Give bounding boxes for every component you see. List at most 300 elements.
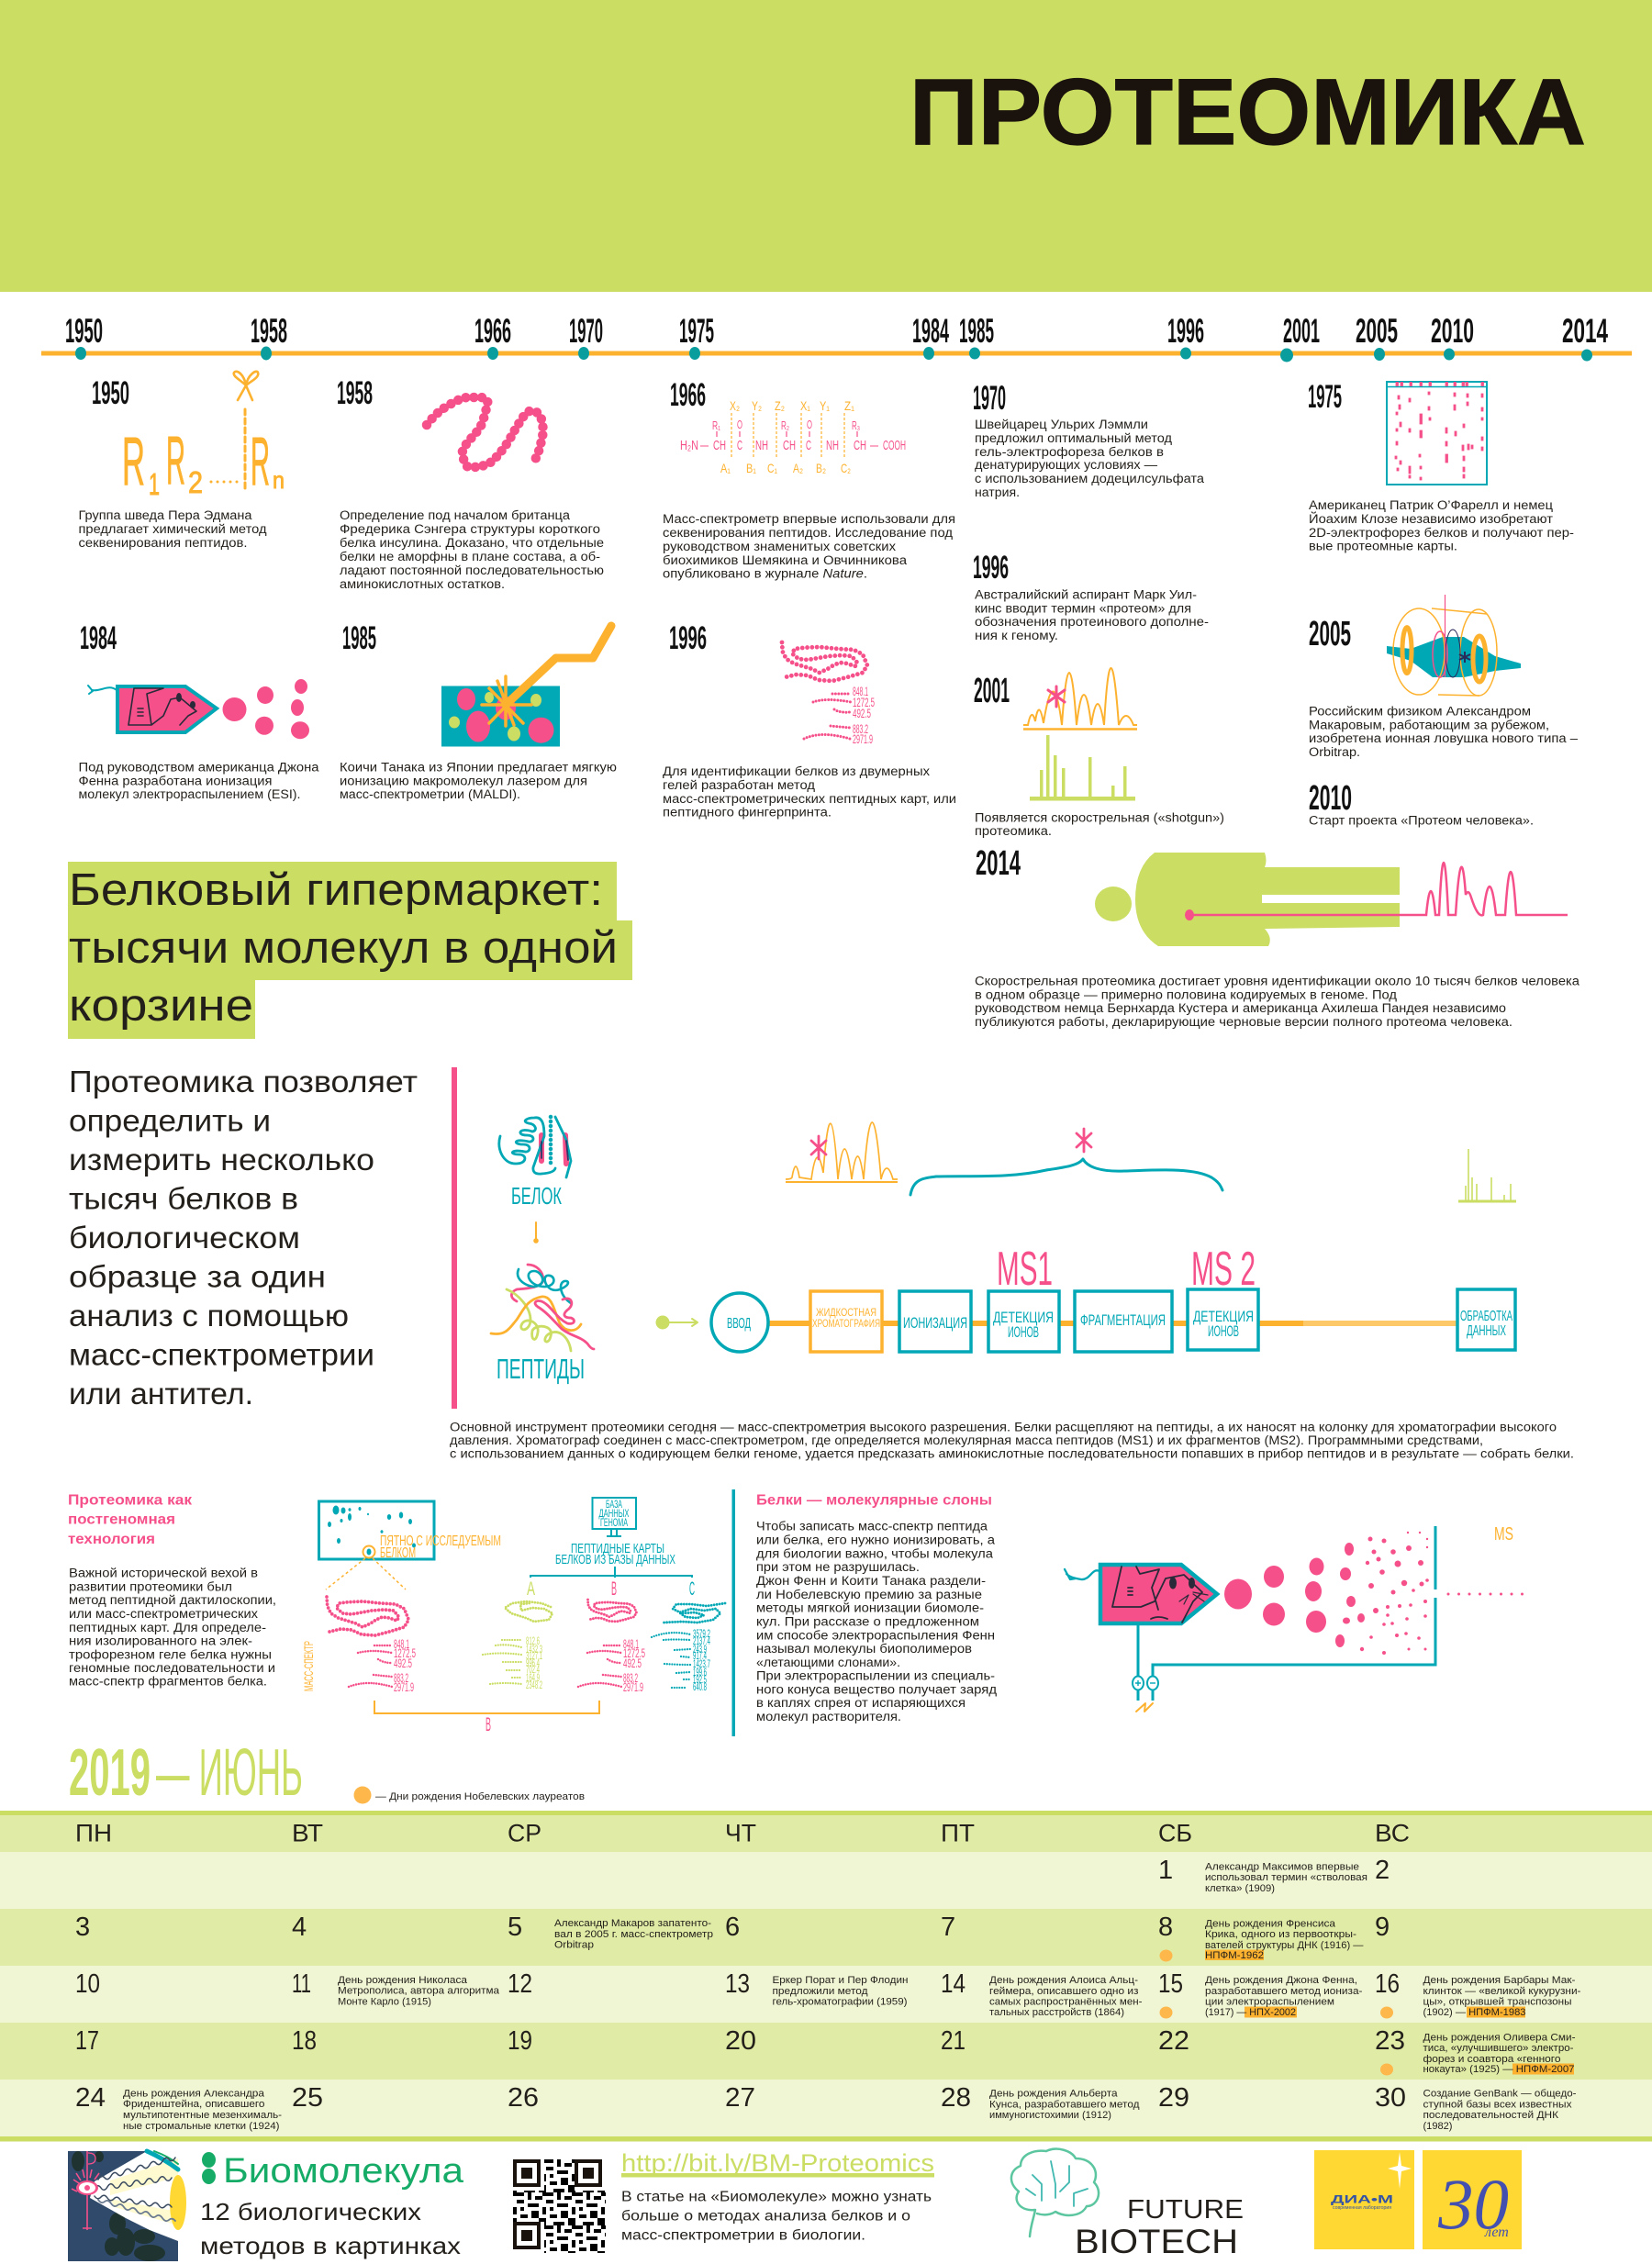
text elephants: методы мягкой ионизации биомоле-	[756, 1600, 984, 1615]
text 1985	[340, 760, 617, 801]
chart: spectrum C: 3579.2	[693, 1627, 710, 1640]
chart: spectrum C: 199.6	[693, 1666, 707, 1678]
step: ion detection 2	[1188, 1289, 1258, 1350]
weekday header: ПН	[75, 1819, 112, 1846]
text: 12 methods	[200, 2198, 461, 2259]
title: ПРОТЕОМИКА	[910, 60, 1586, 164]
day numbers: 27	[725, 2083, 755, 2113]
text 1996 right: кинс вводит термин «протеом» для	[975, 601, 1191, 615]
day numbers: 25	[292, 2083, 323, 2113]
note: June 30: Создание GenBank — общедо-	[1423, 2089, 1577, 2100]
text 1950	[79, 508, 267, 550]
note: June 24: мультипотентные мезенхималь-	[123, 2110, 282, 2121]
protein C	[664, 1603, 725, 1623]
chart: spectrum B: 1272.5	[623, 1645, 645, 1660]
chart: spectrum C: 917.4	[693, 1649, 707, 1662]
day numbers: 19	[508, 2026, 532, 2056]
text 1970	[975, 418, 1205, 499]
logo: Future Biotech: BIOTECH	[1075, 2223, 1238, 2260]
day numbers: 13	[725, 1969, 750, 1999]
text 1996 left: масс-спектрометрических пептидных карт, или	[663, 792, 956, 806]
text 1966: Масс-спектрометр впервые использовали для	[663, 512, 955, 526]
text 1996 left: Для идентификации белков из двумерных	[663, 764, 930, 778]
pipeline line	[769, 1321, 1457, 1326]
panel: 2010: 2010	[1309, 779, 1352, 818]
arrow down	[533, 1222, 539, 1244]
text 1958: Определение под началом британца	[340, 508, 571, 522]
calendar heading: — ИЮНЬ	[156, 1736, 303, 1810]
note: June 15: День рождения Джона Фенна,	[1205, 1975, 1357, 1986]
text 1970: предложил оптимальный метод	[975, 431, 1172, 445]
label: A: A	[527, 1578, 535, 1600]
panel: 2001: 2001	[974, 672, 1010, 710]
text 1966: опубликовано в журнале Nature .	[663, 567, 867, 580]
text elephants: ного конуса вещество получает заряд	[756, 1683, 997, 1696]
text 1985: масс-спектрометрии (MALDI).	[340, 787, 520, 801]
text: 12 methods: методов в картинках	[200, 2232, 461, 2259]
QR code	[513, 2159, 606, 2253]
icon: peptide mass fingerprint: 492.5	[853, 706, 871, 720]
chart: spectrum A: 164.9	[526, 1671, 540, 1684]
note: June 14: тальных расстройств (1864)	[989, 2007, 1124, 2018]
timeline years: 1975	[679, 312, 714, 350]
icon: peptide mass fingerprint: 848.1	[853, 684, 868, 698]
step: fragmentation	[1075, 1291, 1172, 1352]
day numbers: 11	[292, 1969, 311, 1999]
weekday header: СБ	[1158, 1819, 1192, 1846]
day numbers: 1	[1158, 1856, 1173, 1885]
heading elephants: Белки — молекулярные слоны	[756, 1492, 992, 1509]
divider bar teal	[732, 1489, 735, 1736]
day numbers: 22	[1158, 2026, 1189, 2056]
chart: chromatogram	[786, 1122, 898, 1182]
note: June 16: клинток — «великой кукурузни-	[1423, 1986, 1581, 1997]
calendar	[0, 1811, 1652, 2142]
chart: peptide fragmentation formula: B₁	[746, 461, 756, 475]
chart: spectrum B	[578, 1636, 645, 1694]
logo: DIAM 30 years: ДИА•М	[1331, 2193, 1393, 2206]
text elephants: «летающими слонами».	[756, 1656, 900, 1669]
step: ion detection 2: ИОНОВ	[1208, 1322, 1239, 1340]
text 1984: Фенна разработана ионизация	[79, 775, 272, 787]
chart: spectrum bars 2001	[1030, 735, 1135, 800]
text post-genomic	[69, 1566, 276, 1689]
icon: peptide R chain with scissors: R	[251, 423, 270, 499]
chart: peptide fragmentation formula: C₁	[767, 461, 777, 475]
text 1958: белка инсулина. Доказано, что отдельные	[340, 536, 604, 550]
protein B	[587, 1600, 637, 1622]
text 1970: с использованием додецилсульфата	[975, 472, 1205, 485]
panel: 1984: 1984	[80, 620, 117, 656]
icon: peptide mass fingerprint: 1272.5	[853, 695, 875, 709]
text 2005: Orbitrap.	[1309, 745, 1360, 759]
icon: peptide R chain with scissors: R	[122, 423, 145, 499]
timeline years: 1958	[251, 312, 287, 350]
chart: peptide fragmentation formula: R₁	[712, 418, 720, 432]
day numbers: 29	[1158, 2083, 1189, 2113]
icon: peptide mass fingerprint: 2971.9	[853, 731, 873, 746]
label: spot	[380, 1533, 501, 1561]
icon: brain	[1011, 2149, 1099, 2236]
chart: sample spectrum: 883.2	[394, 1670, 408, 1685]
chart: spectrum B: 2971.9	[623, 1679, 643, 1694]
text 1950: предлагает химический метод	[79, 522, 267, 536]
ion beam dots	[1448, 1593, 1524, 1595]
panel: post-genomic technology: 3127.1	[526, 1649, 542, 1662]
timeline years: 2010	[1431, 312, 1474, 350]
icon: peptide mass fingerprint: 883.2	[853, 721, 868, 736]
heading post-genomic	[68, 1492, 192, 1547]
text 2014	[975, 975, 1580, 1029]
panel: 1996 left	[663, 620, 956, 819]
text post-genomic: ния изолированного на элек-	[69, 1634, 252, 1648]
timeline	[41, 312, 1632, 362]
text post-genomic: пептидных карт. Для определе-	[69, 1621, 266, 1634]
text 1958: белки не аморфны в плане состава, а об-	[340, 550, 600, 563]
logo: DIAM 30 years: 30	[1437, 2164, 1509, 2244]
timeline years: 2001	[1283, 312, 1320, 350]
note: June 30: ступной базы всех известных	[1423, 2100, 1572, 2111]
note: June 16: цы», открывшей транспозоны	[1423, 1997, 1572, 2008]
text 2001	[975, 811, 1224, 838]
text 1950: секвенирования пептидов.	[79, 536, 248, 550]
note: June 28	[989, 2089, 1140, 2121]
text elephants: для биологии важно, чтобы молекула	[756, 1547, 994, 1560]
step: fragmentation: ФРАГМЕНТАЦИЯ	[1080, 1311, 1166, 1329]
panel: 1975 right: 1975	[1308, 379, 1342, 415]
weekday header: ЧТ	[725, 1819, 756, 1846]
day numbers: 12	[508, 1969, 532, 1999]
icon: peptide R chain with scissors: R	[166, 422, 185, 498]
day numbers: 30	[1375, 2083, 1406, 2113]
panel: 1975 right	[1308, 379, 1574, 552]
chart: spectrum B: 883.2	[623, 1670, 638, 1685]
icon: sample input arrow	[655, 1316, 698, 1329]
logo: DIAM 30 years	[1314, 2150, 1522, 2249]
chart: peptide fragmentation formula: X₁	[800, 398, 810, 413]
chart: peptide fragmentation formula: CH	[854, 438, 866, 453]
heading: protein hypermarket	[68, 862, 632, 1039]
day numbers: 28	[941, 2083, 971, 2113]
note: June 1: использовал термин «стволовая	[1205, 1872, 1367, 1883]
step: liquid chromatography: ХРОМАТОГРАФИЯ	[812, 1317, 880, 1330]
step: liquid chromatography	[810, 1291, 882, 1352]
intro text: измерить несколько	[69, 1143, 374, 1177]
note: June 16	[1423, 1975, 1581, 2018]
chart: peptide fragmentation formula	[680, 398, 906, 475]
Nobel day markers	[1160, 1949, 1393, 2076]
icon: genome database monitor: ГЕНОМА	[600, 1516, 628, 1529]
icon: voltage zigzag	[1136, 1703, 1153, 1712]
chart: spectrum C	[652, 1627, 710, 1693]
intro text: определить и	[69, 1103, 271, 1138]
text 1996 left	[663, 764, 956, 819]
panel: 1985	[340, 620, 617, 801]
label: peptides: ПЕПТИДЫ	[497, 1353, 585, 1385]
timeline years	[65, 312, 1608, 350]
brace with star	[910, 1129, 1222, 1195]
note: June 23	[1423, 2032, 1576, 2075]
panel: proteins are molecular elephants	[756, 1492, 1524, 1723]
text 1975 right: Американец Патрик О’Фарелл и немец	[1309, 498, 1553, 512]
calendar heading: 2019	[69, 1736, 151, 1810]
panel: 2014: 2014	[976, 844, 1021, 883]
step: input: ВВОД	[727, 1316, 751, 1332]
chart: peptide fragmentation formula: CH	[713, 438, 726, 453]
chart: peptide fragmentation formula: Y₁	[820, 398, 830, 413]
logo: Biomolecula: Биомолекула	[223, 2152, 464, 2191]
text 1966: биохимиков Шемякина и Овчинникова	[663, 553, 908, 567]
icon: peptide R chain with scissors	[122, 372, 285, 501]
text post-genomic: развитии протеомики был	[69, 1580, 232, 1593]
chart: sample spectrum: 2971.9	[394, 1679, 414, 1694]
intro text: анализ с помощью	[69, 1299, 349, 1333]
text 2010: Старт проекта «Протеом человека».	[1309, 813, 1534, 828]
timeline years: 1970	[569, 312, 603, 350]
text elephants: кул. При рассказе о предложенном	[756, 1615, 979, 1628]
note: June 30: последовательностей ДНК	[1423, 2110, 1559, 2121]
icon: MALDI laser	[441, 626, 611, 747]
panel: 1970: 1970	[973, 379, 1006, 417]
text post-genomic: метод пептидной дактилоскопии,	[69, 1593, 276, 1607]
icon: electrospray source with mouse	[88, 679, 309, 739]
icon: human body with spectrum	[1095, 853, 1568, 946]
chart: peptide fragmentation formula: C	[806, 438, 811, 453]
text 1958	[340, 508, 604, 591]
text 1985: ионизацию макромолекул лазером для	[340, 775, 587, 787]
panel: 1984	[79, 620, 319, 801]
note: June 23: тиса, «улучшившего» электро-	[1423, 2043, 1574, 2054]
day numbers: 24	[75, 2083, 106, 2113]
text 1975 right: Йоахим Клозе независимо изобретают	[1309, 512, 1553, 526]
note: June 14: День рождения Алоиса Альц-	[989, 1975, 1138, 1986]
panel: 2005	[1309, 595, 1579, 759]
panel: 2001	[974, 668, 1224, 838]
heading: protein hypermarket: Белковый гипермаркет:	[69, 865, 603, 915]
note: June 15	[1205, 1975, 1363, 2018]
note: June 13: гель-хроматографии (1959)	[773, 1997, 907, 2008]
text 1996 right	[975, 587, 1209, 642]
chart: sample spectrum: 492.5	[394, 1656, 412, 1670]
icon: star	[1388, 2152, 1412, 2189]
day numbers: 18	[292, 2026, 317, 2056]
timeline dots	[75, 347, 1592, 362]
panel: post-genomic technology: С	[689, 1578, 695, 1600]
panel: 1958: 1958	[337, 375, 373, 411]
icon: genome database monitor	[593, 1498, 636, 1536]
text 1984	[79, 760, 319, 801]
text post-genomic: или масс-спектрометрических	[69, 1607, 258, 1621]
calendar heading	[69, 1736, 303, 1810]
text elephants: им способе электрораспыления Фенн	[756, 1628, 995, 1643]
text elephants: Чтобы записать масс-спектр пептида	[756, 1520, 988, 1533]
note: June 5: Orbitrap	[554, 1940, 594, 1951]
icon: orbitrap	[1387, 595, 1521, 696]
note: June 11	[338, 1975, 499, 2008]
icon: minus terminal	[1147, 1676, 1158, 1690]
day numbers: 5	[508, 1913, 522, 1942]
chart: peptide fragmentation formula: R₃	[852, 418, 860, 432]
text 1996 left: пептидного фингерпринта.	[663, 806, 832, 819]
note: June 16: (1902) — НПФМ-1983	[1423, 2007, 1525, 2018]
chart: peptide fragmentation formula: H₂N	[680, 438, 698, 453]
label: peptide maps from database: ПЕПТИДНЫЕ КАРТЫ	[571, 1541, 664, 1556]
text: 12 methods: 12 биологических	[200, 2198, 421, 2225]
note: June 15: (1917) — НПХ-2002	[1205, 2007, 1296, 2018]
text post-genomic: трофорезном геле белка нужны	[69, 1648, 272, 1661]
day numbers: 21	[941, 2026, 966, 2056]
chart: peptide fragmentation formula: —	[870, 438, 878, 453]
panel: 2010	[1309, 779, 1534, 828]
intro text: образце за один	[69, 1259, 326, 1294]
step: data processing: ДАННЫХ	[1467, 1323, 1506, 1339]
day numbers: 23	[1375, 2026, 1405, 2056]
chart: spectrum B: 492.5	[623, 1656, 642, 1670]
intro text: Протеомика позволяет	[69, 1065, 418, 1099]
text: article note: В статье на «Биомолекуле» можно узнать	[621, 2190, 932, 2204]
text 1975 right	[1309, 498, 1574, 552]
intro text: масс-спектрометрии	[69, 1338, 374, 1371]
caption: main tool: Основной инструмент протеомики сегодня — масс-спектрометрия высокого разрешения. Белки расщепляют на пептиды, а их наносят на колонку для хроматографии высокого	[450, 1421, 1557, 1433]
icon: protein chain	[327, 1597, 408, 1635]
text 1970: гель-электрофореза белков в	[975, 445, 1164, 459]
text post-genomic: Важной исторической вехой в	[69, 1566, 258, 1580]
text 2005	[1309, 705, 1579, 759]
text: article note: больше о методах анализа белков и о	[621, 2208, 910, 2225]
intro text: или антител.	[69, 1377, 253, 1411]
text elephants	[756, 1520, 997, 1723]
timeline years: 1996	[1167, 312, 1204, 350]
text: article note: масс-спектрометрии в биологии.	[621, 2228, 865, 2243]
note: June 5: Александр Макаров запатенто-	[554, 1918, 711, 1929]
label: MS2: MS 2	[1191, 1243, 1256, 1296]
text 1975 right: вые протеомные карты.	[1309, 540, 1457, 552]
icon: genome database monitor: ДАННЫХ	[598, 1507, 630, 1520]
step: data processing: ОБРАБОТКА	[1460, 1309, 1512, 1324]
panel: mass spec workflow	[452, 1067, 1516, 1409]
note: June 11: Метрополиса, автора алгоритма	[338, 1986, 499, 1997]
text 1970: денатурирующих условиях —	[975, 458, 1158, 472]
chart: peptide fragmentation formula: A₂	[793, 461, 803, 475]
note: June 24	[123, 2089, 282, 2132]
note: June 13: предложили метод	[773, 1986, 868, 1997]
chart: spectrum A: 812.6	[526, 1634, 540, 1647]
weekday header: ПТ	[941, 1819, 975, 1846]
note: June 28: Кунса, разработавшего метод	[989, 2100, 1140, 2111]
note: June 11: День рождения Николаса	[338, 1975, 467, 1986]
note: June 13	[773, 1975, 909, 2008]
text 1966: секвенирования пептидов. Исследование под	[663, 526, 953, 540]
chart: spectrum C: 1423.7	[693, 1657, 710, 1670]
heading: protein hypermarket: корзине	[69, 981, 253, 1031]
chart: peptide fragmentation formula: NH	[826, 438, 839, 453]
note: June 1	[1205, 1861, 1367, 1894]
day numbers: 4	[292, 1913, 307, 1942]
label: MS1: MS1	[997, 1243, 1053, 1296]
caption: main tool	[450, 1421, 1574, 1461]
spray droplets	[1224, 1532, 1429, 1655]
chart: sample spectrum: 848.1	[394, 1636, 409, 1651]
icon: genome database monitor: БАЗА	[606, 1498, 622, 1511]
step: ionization	[899, 1291, 971, 1352]
day numbers: 14	[941, 1969, 966, 1999]
text 1996 right: обозначения протеинового дополне-	[975, 615, 1209, 629]
chart: peptide fragmentation formula: CH	[783, 438, 796, 453]
text 1966: руководством знаменитых советских	[663, 540, 896, 553]
step: ionization: ИОНИЗАЦИЯ	[903, 1314, 967, 1332]
logo: DIAM 30 years: современная лаборатория	[1333, 2205, 1391, 2211]
text elephants: в каплях спрея от испаряющихся	[756, 1696, 966, 1710]
label: belok: БЕЛОК	[511, 1182, 562, 1210]
day numbers: 15	[1158, 1969, 1183, 1999]
chart: spectrum A	[483, 1634, 542, 1691]
note: June 8	[1205, 1918, 1364, 1961]
chart: sample spectrum	[349, 1636, 416, 1694]
protein A	[505, 1601, 553, 1622]
header band	[0, 0, 1652, 292]
text 1966	[663, 512, 955, 580]
text 1950: Группа шведа Пера Эдмана	[79, 508, 252, 522]
note: June 8: вателей структуры ДНК (1916) —	[1205, 1940, 1364, 1951]
panel: post-genomic technology: В	[611, 1578, 617, 1600]
day numbers: 20	[725, 2026, 756, 2056]
chart: spectrum C: 2137.4	[693, 1634, 710, 1647]
text 2005: изобретена ионная ловушка нового типа –	[1309, 731, 1579, 745]
note: June 11: Монте Карло (1915)	[338, 1997, 431, 2008]
note: June 1: клетка» (1909)	[1205, 1883, 1275, 1894]
note: June 23: День рождения Оливера Сми-	[1423, 2032, 1576, 2043]
weekday header: ВТ	[292, 1819, 323, 1846]
step: ion detection 2: ДЕТЕКЦИЯ	[1193, 1308, 1254, 1325]
timeline years: 1985	[959, 312, 994, 350]
day numbers: 9	[1375, 1913, 1390, 1942]
note: June 28: иммуногистохимии (1912)	[989, 2110, 1111, 2121]
caption: main tool: с использованием данных о кодирующем белки геноме, удается предсказать аминокислотные последовательности попавших в прибор пептидов и в результате — собрать белки.	[450, 1446, 1574, 1461]
chart: peptide fragmentation formula: O	[807, 418, 812, 431]
panel: post-genomic technology: 1432.3	[526, 1643, 542, 1656]
text post-genomic: геномные последовательности и	[69, 1661, 275, 1675]
text 1970: Швейцарец Ульрих Лэммли	[975, 418, 1148, 431]
panel: 2014	[975, 844, 1580, 1029]
chart: peptide fragmentation formula: B₂	[816, 461, 826, 475]
day numbers: 26	[508, 2083, 539, 2113]
text 1996 right: Австралийский аспирант Марк Уил-	[975, 587, 1197, 602]
text 1996 left: гелей разработан метод	[663, 778, 815, 792]
text 1984: Под руководством американца Джона	[79, 760, 319, 775]
icon: peptide mass fingerprint	[782, 642, 875, 746]
note: June 23: нокаута» (1925) — НПФМ-2007	[1423, 2064, 1575, 2075]
text 2014: Скорострельная протеомика достигает уровня идентификации около 10 тысяч белков человека	[975, 975, 1580, 987]
text 2001: протеомика.	[975, 824, 1052, 838]
text elephants: ли Нобелевскую премию за разные	[756, 1588, 982, 1601]
note: June 14: геймера, описавшего одно из	[989, 1986, 1139, 1997]
logo: Future Biotech	[1011, 2149, 1244, 2260]
icon: peptide R chain with scissors: n	[273, 466, 285, 494]
day numbers: 17	[75, 2026, 99, 2056]
note: June 8: День рождения Френсиса	[1205, 1918, 1335, 1929]
step: liquid chromatography: ЖИДКОСТНАЯ	[816, 1306, 876, 1319]
chart: MS2 spectrum	[1458, 1149, 1516, 1202]
chart: peptide fragmentation formula: C₂	[841, 461, 851, 475]
day numbers: 8	[1158, 1913, 1173, 1942]
timeline years: 2014	[1562, 312, 1608, 350]
laureate highlights	[1205, 1949, 1574, 2074]
heading: protein hypermarket: тысячи молекул в одной	[69, 923, 618, 973]
panel: post-genomic technology: В	[486, 1714, 491, 1735]
icon: 2D gel	[1387, 382, 1487, 485]
link with underline: http://bit.ly/BM-Proteomics	[621, 2149, 934, 2177]
heading post-genomic: технология	[68, 1532, 155, 1547]
